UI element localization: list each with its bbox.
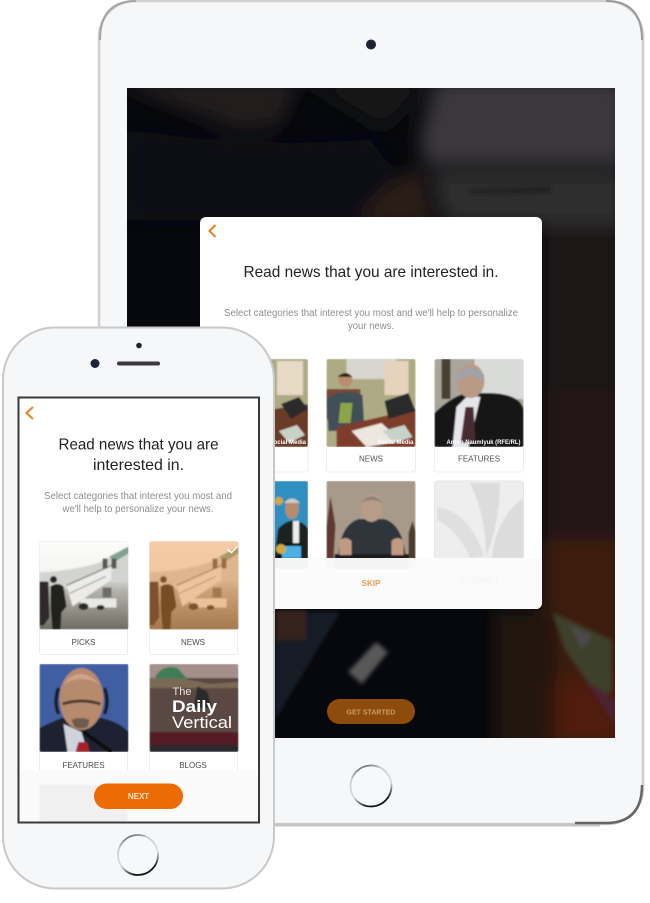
- back arrow: [210, 225, 216, 237]
- tile labels: NEWS: [359, 454, 383, 464]
- screen border: [18, 398, 259, 822]
- phone back arrow: [26, 407, 33, 419]
- tile labels: NEWS: [181, 638, 205, 647]
- tile: features photo: Anton Naumlyuk (RFE/RL): [446, 440, 520, 446]
- picks tile photo: [40, 542, 128, 630]
- tablet screen background photo: [127, 80, 625, 748]
- get started button: [327, 699, 415, 724]
- tile: news photo: [326, 359, 416, 447]
- features tile photo: [40, 664, 128, 752]
- tile: daily vertical host photo: [326, 481, 416, 558]
- phone home button: [118, 835, 158, 875]
- earpiece dot: [136, 343, 142, 348]
- phone subtitle: [44, 491, 232, 515]
- blog title text: Daily: [172, 697, 218, 716]
- phone speaker: [117, 362, 160, 366]
- tile labels: FEATURES: [62, 761, 105, 770]
- tile frames: [40, 542, 238, 774]
- next bar: [20, 770, 258, 822]
- tile labels: PICKS: [71, 638, 96, 647]
- tile: office photo partly hidden: [270, 359, 308, 447]
- tile: politician photo: [275, 481, 308, 558]
- tile labels: [359, 454, 500, 464]
- next button: NEXT: [128, 792, 149, 801]
- tile: news photo: Social Media: [377, 440, 414, 446]
- skip bar: [200, 558, 542, 609]
- tablet edge highlights: [100, 1, 642, 825]
- tile frames row one: [219, 359, 524, 472]
- skip bar: SKIP: [362, 579, 381, 588]
- next button: [94, 784, 183, 809]
- tablet device: [99, 1, 643, 825]
- card panel: [200, 217, 542, 609]
- phone heading: Read news that you are: [58, 436, 219, 454]
- blog title text: The: [172, 686, 191, 698]
- card subtitle: [224, 308, 518, 332]
- card heading: Read news that you are interested in.: [244, 264, 498, 281]
- tile: features photo: [434, 359, 524, 447]
- phone body: [3, 328, 274, 888]
- blog title text: Vertical: [172, 713, 232, 732]
- tile labels: [62, 638, 207, 770]
- phone screen: [18, 398, 259, 822]
- phone subtitle: Select categories that interest you most and: [44, 491, 232, 502]
- phone camera: [90, 359, 100, 368]
- tile: office photo partly hidden: Social Media: [270, 440, 307, 446]
- tablet body: [99, 1, 643, 824]
- news tile photo selected: [150, 542, 238, 630]
- phone heading: interested in.: [93, 457, 184, 474]
- card subtitle: your news.: [348, 321, 394, 332]
- tablet card: [200, 217, 542, 609]
- phone heading: [58, 436, 219, 474]
- tile frames row two: [219, 481, 416, 593]
- tablet camera: [366, 40, 376, 50]
- blog title text: [172, 687, 231, 728]
- tile labels: BLOGS: [179, 761, 207, 770]
- blogs tile photo with title: [150, 664, 238, 752]
- phone device: [3, 328, 274, 888]
- tile labels: FEATURES: [458, 454, 500, 464]
- card subtitle: Select categories that interest you most and we'll help to personalize: [224, 308, 518, 319]
- phone subtitle: we'll help to personalize your news.: [62, 504, 214, 515]
- tablet home button: [350, 766, 392, 806]
- skip bar: INTERNET: [459, 576, 499, 585]
- tile: placeholder logo: [434, 481, 524, 593]
- get started button: GET STARTED: [346, 710, 396, 716]
